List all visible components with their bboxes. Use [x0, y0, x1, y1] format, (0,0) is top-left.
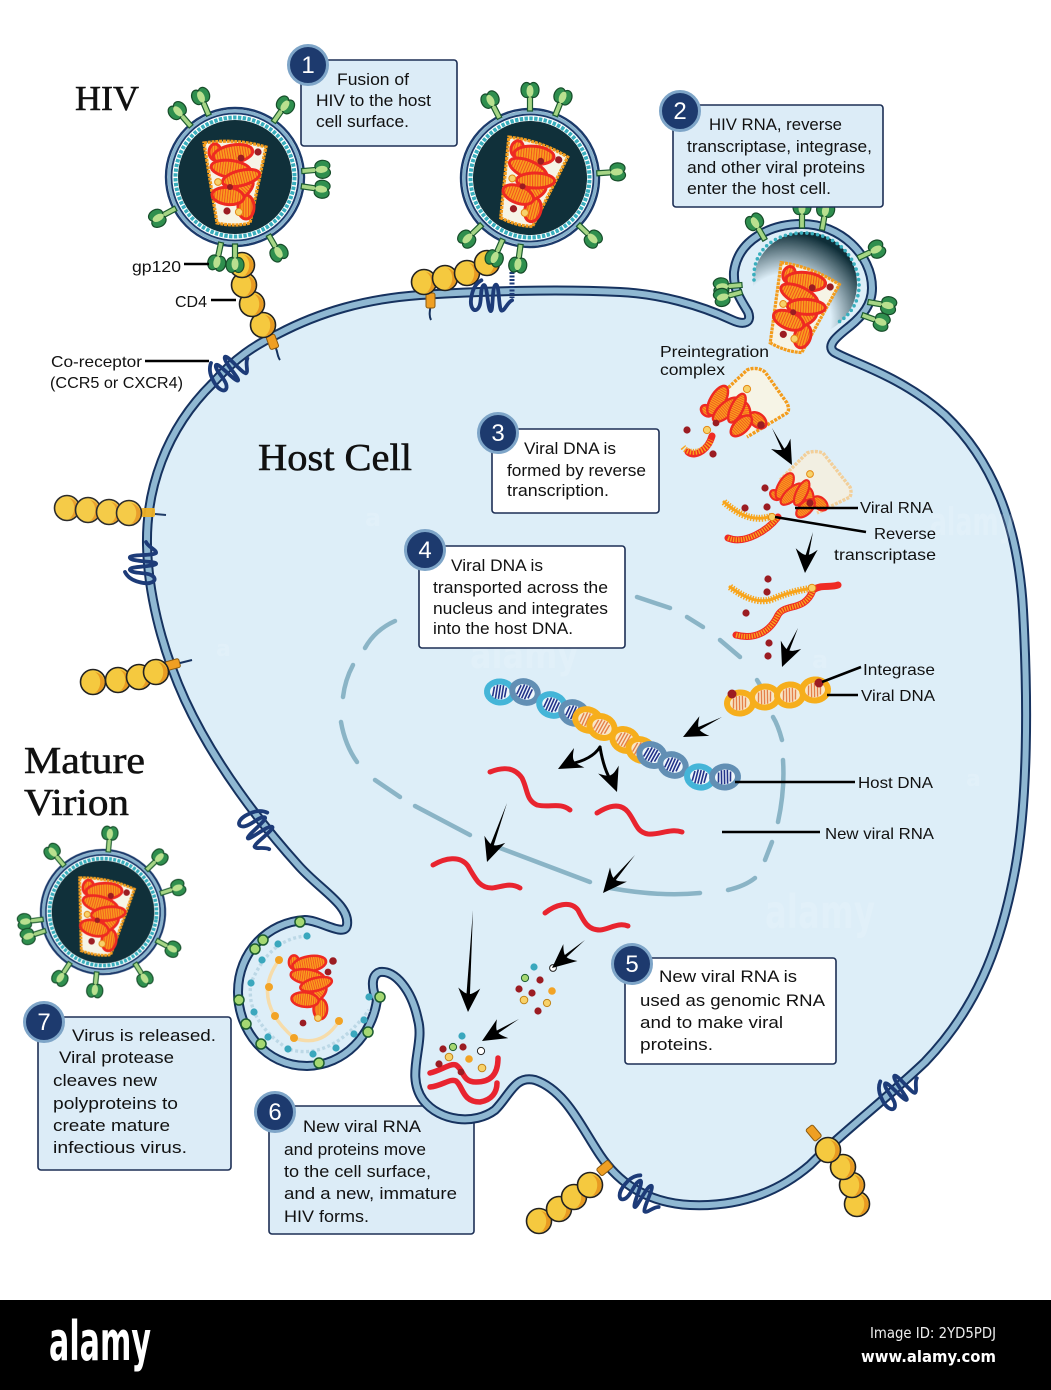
label: integrase: Integrase: [863, 662, 935, 679]
step 2 callout: 2: [673, 98, 687, 125]
preintegration complex: [683, 368, 788, 458]
title: Mature Virion: Virion: [24, 782, 129, 824]
label: preintegration complex: complex: [660, 362, 725, 379]
label: viral RNA: Viral RNA: [860, 500, 933, 517]
step 3 callout: formed by reverse: [507, 461, 646, 480]
watermark: a: [812, 646, 828, 674]
step 3 callout: Viral DNA is: [524, 439, 616, 458]
step 2 callout: and other viral proteins: [687, 158, 865, 177]
label: gp120: gp120: [132, 259, 181, 276]
step 7 callout: Viral protease: [59, 1048, 174, 1067]
step 6 callout text: HIV forms.: [284, 1207, 369, 1226]
title: Mature Virion: [24, 740, 145, 824]
label: gp120: [132, 259, 209, 276]
step 2 callout: [660, 92, 883, 207]
footer bar: [0, 1300, 1051, 1390]
viral DNA with integrase: [726, 678, 829, 715]
title: HIV: HIV: [75, 79, 139, 118]
label: integrase: [822, 662, 935, 682]
step 6 callout text: and a new, immature: [284, 1184, 457, 1203]
label: preintegration complex: Preintegration: [660, 344, 769, 361]
step 4 callout: [406, 530, 625, 648]
label: co-receptor: Co-receptor: [51, 354, 142, 371]
step 2 callout: HIV RNA, reverse: [709, 115, 842, 134]
text box 6 panel: [269, 1106, 474, 1234]
step 1 callout: cell surface.: [316, 112, 409, 131]
step 7 callout: [24, 1002, 231, 1170]
step 6 callout text: 6: [268, 1099, 282, 1126]
watermark: [216, 500, 1015, 939]
viral proteins and RNA at the membrane: [430, 1032, 498, 1102]
label: reverse transcriptase: transcriptase: [834, 547, 936, 564]
reverse transcription intermediate: [730, 575, 838, 660]
step 1 callout: HIV to the host: [316, 91, 431, 110]
step 4 callout: into the host DNA.: [433, 619, 573, 638]
step 6 callout text: to the cell surface,: [284, 1162, 431, 1181]
label: co-receptor: (CCR5 or CXCR4): [50, 375, 183, 392]
step 1 callout: 1: [301, 52, 315, 79]
budding immature virion: [234, 917, 385, 1068]
step 7 callout: Virus is released.: [72, 1026, 216, 1045]
label: viral DNA: [827, 688, 935, 705]
label: reverse transcriptase: Reverse: [874, 526, 936, 543]
step 5 callout: proteins.: [640, 1035, 713, 1054]
free viral proteins cluster: [515, 963, 556, 1015]
uncoating capsid with reverse transcription: [724, 452, 851, 540]
step 7 callout: polyproteins to: [53, 1094, 178, 1113]
step 1 callout: Fusion of: [337, 70, 409, 89]
step 1 callout: [288, 46, 457, 146]
host DNA helix with integrated viral DNA: [486, 678, 739, 790]
step 7 callout: cleaves new: [53, 1071, 158, 1090]
co-receptor 2: [470, 272, 512, 312]
step 4 callout: Viral DNA is: [451, 556, 543, 575]
step 7 callout: infectious virus.: [53, 1138, 187, 1157]
host cell membrane: [147, 224, 1026, 1205]
label: viral DNA: Viral DNA: [861, 688, 935, 705]
arrows: [457, 428, 818, 1050]
nucleus dashed envelope: [341, 597, 783, 894]
entering virus capsid and spikes: [712, 200, 898, 359]
step 2 callout: transcriptase, integrase,: [687, 137, 872, 156]
watermark: alamy: [765, 885, 875, 939]
label: host DNA: Host DNA: [858, 775, 933, 792]
step 6 callout text: [256, 1092, 457, 1226]
virus 3 mature virion: [17, 826, 187, 998]
new viral RNA strands: [433, 769, 682, 930]
watermark: a: [365, 504, 381, 532]
label: viral RNA: [795, 500, 933, 517]
step 3 callout: 3: [491, 420, 505, 447]
label: reverse transcriptase: [775, 517, 936, 564]
step 2 callout: enter the host cell.: [687, 179, 831, 198]
co-receptor 5: [617, 1171, 668, 1216]
virus 2 fusing: [445, 82, 626, 274]
virus 1 attached to CD4: [146, 86, 331, 273]
step 6 callout text: and proteins move: [284, 1140, 426, 1159]
CD4 chain 4: [80, 658, 192, 694]
label: co-receptor: [50, 354, 209, 392]
step 7 callout: 7: [37, 1009, 51, 1036]
step 4 callout: nucleus and integrates: [433, 599, 608, 618]
co-receptor 6: [872, 1062, 923, 1112]
label: CD4: [175, 294, 236, 311]
step 4 callout: transported across the: [433, 578, 608, 597]
footer bar: Image ID: 2YD5PDJ: [870, 1324, 996, 1342]
co-receptor 4: [236, 804, 286, 855]
CD4 chain 5: [526, 1160, 613, 1234]
step 5 callout: used as genomic RNA: [640, 991, 826, 1010]
title: Mature Virion: Mature: [24, 740, 145, 782]
CD4 chain 2: [412, 250, 500, 320]
step 6 callout text: New viral RNA: [303, 1117, 422, 1136]
watermark: a: [966, 767, 981, 792]
watermark: a: [216, 637, 231, 662]
label: preintegration complex: [660, 344, 769, 379]
step 7 callout: create mature: [53, 1116, 170, 1135]
step 3 callout: transcription.: [507, 481, 609, 500]
co-receptor 3: [125, 542, 156, 583]
step 3 callout: [478, 414, 659, 513]
footer bar: alamy: [49, 1310, 151, 1373]
co-receptor 1: [203, 343, 254, 394]
watermark: alamy: [470, 633, 578, 677]
step 5 callout: New viral RNA is: [659, 967, 797, 986]
step 5 callout: 5: [625, 951, 639, 978]
title: Host Cell: Host Cell: [258, 437, 412, 479]
CD4 chain 6: [805, 1124, 870, 1216]
step 5 callout: and to make viral: [640, 1013, 783, 1032]
label: new viral RNA: New viral RNA: [825, 826, 934, 843]
label: CD4: CD4: [175, 294, 207, 311]
CD4 chain 3: [54, 496, 166, 526]
step 5 callout: [612, 944, 836, 1064]
CD4 chain 1: [230, 252, 280, 360]
footer bar: www.alamy.com: [861, 1347, 996, 1366]
step 4 callout: 4: [418, 537, 432, 564]
